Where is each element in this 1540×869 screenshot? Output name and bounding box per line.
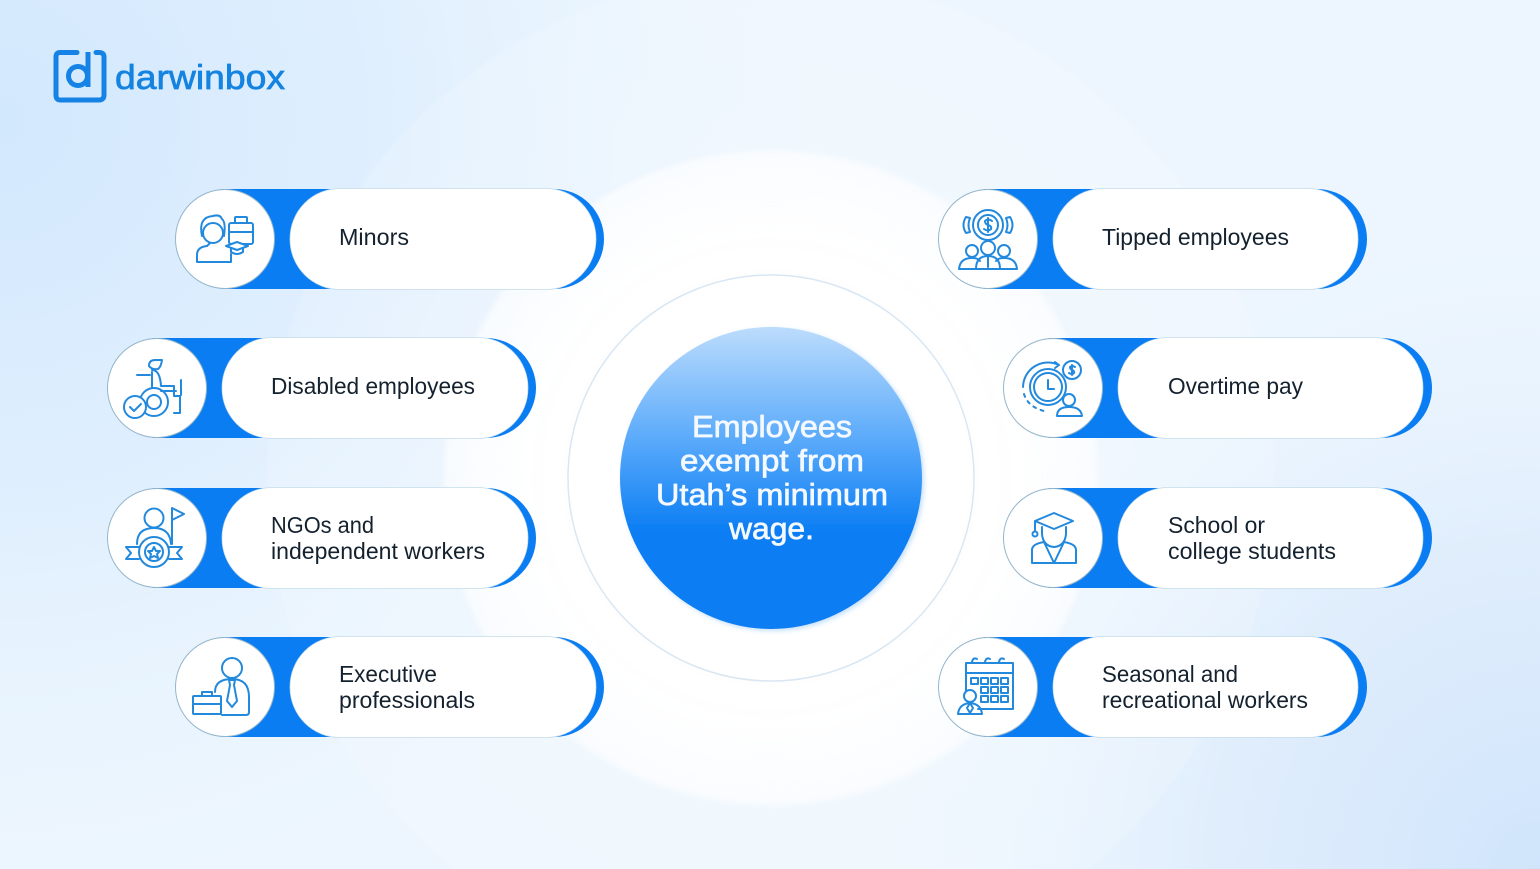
heading: wage. — [728, 511, 814, 546]
panel: Overtime pay: Overtime pay — [1168, 373, 1303, 399]
panel: Seasonal and recreational workers: recreational workers — [1102, 687, 1308, 713]
logo wordmark: darwinbox — [115, 59, 285, 97]
panel: NGOs and independent workers — [108, 488, 536, 588]
background halo — [444, 151, 1098, 805]
panel: Executive professionals: professionals — [339, 687, 475, 713]
icon: tipped team with coin — [959, 210, 1017, 269]
logo mark — [56, 52, 104, 100]
panel: Seasonal and recreational workers — [938, 636, 1367, 738]
heading: Utah’s minimum — [656, 477, 888, 512]
panel: Seasonal and recreational workers: Seasonal and — [1102, 661, 1238, 687]
icon: graduate — [1032, 513, 1076, 563]
panel: NGOs and independent workers: independent workers — [271, 538, 485, 564]
centre circle with heading — [620, 327, 922, 629]
panel: School or college students: School or — [1168, 512, 1265, 538]
icon: calendar with worker — [958, 658, 1013, 714]
panel: Tipped employees: Tipped employees — [1102, 224, 1289, 250]
icon: student with briefcase — [197, 215, 253, 262]
icon: executive with briefcase — [193, 658, 249, 715]
panel: School or college students — [1004, 488, 1432, 588]
centre ring — [568, 275, 974, 681]
panel: Executive professionals: Executive — [339, 661, 437, 687]
panel: Minors: Minors — [339, 224, 409, 250]
panel: Minors — [176, 188, 604, 290]
icon: wheelchair — [124, 360, 181, 418]
panel: Overtime pay — [1004, 338, 1432, 438]
icon: overtime clock — [1023, 361, 1082, 416]
heading: Employees — [692, 409, 852, 444]
panel: School or college students: college students — [1168, 538, 1336, 564]
heading: exempt from — [680, 443, 864, 478]
logo: darwinbox — [56, 52, 285, 100]
icon: person with badge and flag — [126, 508, 184, 567]
panel: Disabled employees — [108, 338, 536, 438]
panel: Tipped employees — [938, 188, 1367, 290]
panel: NGOs and independent workers: NGOs and — [271, 512, 374, 538]
panel: Executive professionals — [176, 636, 604, 738]
panel: Disabled employees: Disabled employees — [271, 373, 475, 399]
